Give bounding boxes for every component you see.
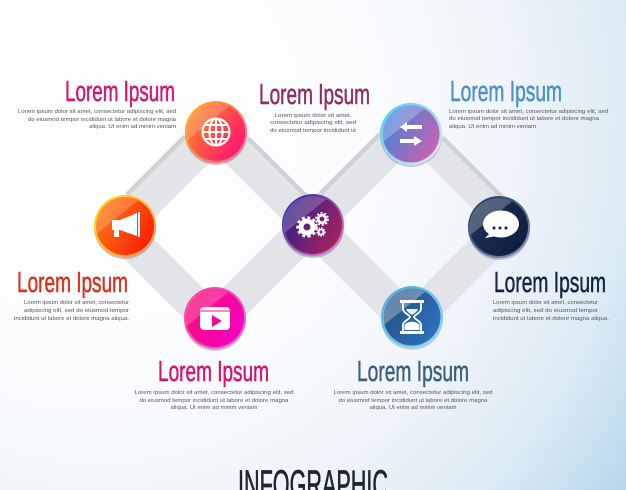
heading: middle left: Lorem Ipsum [17,267,128,299]
text block: bottom left: aliqua. Ut enim ad minim veniam [170,405,258,411]
heading: top left: Lorem Ipsum [65,76,175,108]
text block: middle left: Lorem ipsum dolor sit amet, consectetur [24,300,129,306]
icon: speech bubble button [468,196,530,260]
text block: bottom left: Lorem ipsum dolor sit amet, consectetur adipiscing elit, sed [134,390,294,396]
text block: top left: Lorem ipsum dolor sit amet, consectetur adipiscing elit, sed [18,109,176,115]
text block: bottom centre: do eiusmod tempor incididunt ut labore et dolore magna [338,398,488,404]
icon: arrows button [380,103,442,167]
icon: gears button [282,194,344,258]
text block: top right [449,109,608,130]
icon: video player button [184,287,246,351]
text block: middle left: adipiscing elit, sed do eiusmod tempor [24,308,129,314]
infinity ribbon connector [120,131,510,325]
heading: top right: Lorem Ipsum [450,76,562,108]
text block: top centre: consectetur adipiscing elit, sed [270,120,356,126]
heading: bottom centre: Lorem Ipsum [357,356,469,388]
text block: top right: do eiusmod tempor incididunt ut labore et dolore magna [449,116,600,122]
icon: megaphone button [94,195,156,259]
text block: bottom centre [334,390,492,411]
heading: bottom left: Lorem Ipsum [158,356,269,388]
text block: middle right: adipiscing elit, sed do eiusmod tempor [493,308,598,314]
text block: bottom left: do eiusmod tempor incididunt ut labore et dolore magna [140,398,289,404]
text block: top left: aliqua. Ut enim ad minim veniam [89,124,176,130]
text block: middle left: incididunt ut labore et dolore magna aliqua. [14,316,129,322]
icon: hourglass button [381,286,443,350]
text block: top centre [270,113,356,134]
text block: middle right [493,300,609,322]
text block: middle right: incididunt ut labore et dolore magna aliqua. [493,316,609,322]
text block: top centre: do eiusmod tempor incididunt ut [270,128,356,134]
text block: bottom left [134,390,294,411]
text block: top centre: Lorem ipsum dolor sit amet, [274,113,352,119]
icon: globe button [185,101,247,165]
text block: top right: aliqua. Ut enim ad minim veniam [449,124,536,130]
heading: top centre: Lorem Ipsum [259,79,370,111]
text block: top left: do eiusmod tempor incididunt ut labore et dolore magna [28,117,177,123]
text block: top right: Lorem ipsum dolor sit amet, consectetur adipiscing elit, sed [449,109,608,115]
text block: top left [18,109,177,130]
text block: bottom centre: Lorem ipsum dolor sit amet, consectetur adipiscing elit, sed [334,390,492,396]
text block: middle left [14,300,129,322]
text block: middle right: Lorem ipsum dolor sit amet, consectetur [493,300,598,306]
text block: bottom centre: aliqua. Ut enim ad minim veniam [370,405,457,411]
